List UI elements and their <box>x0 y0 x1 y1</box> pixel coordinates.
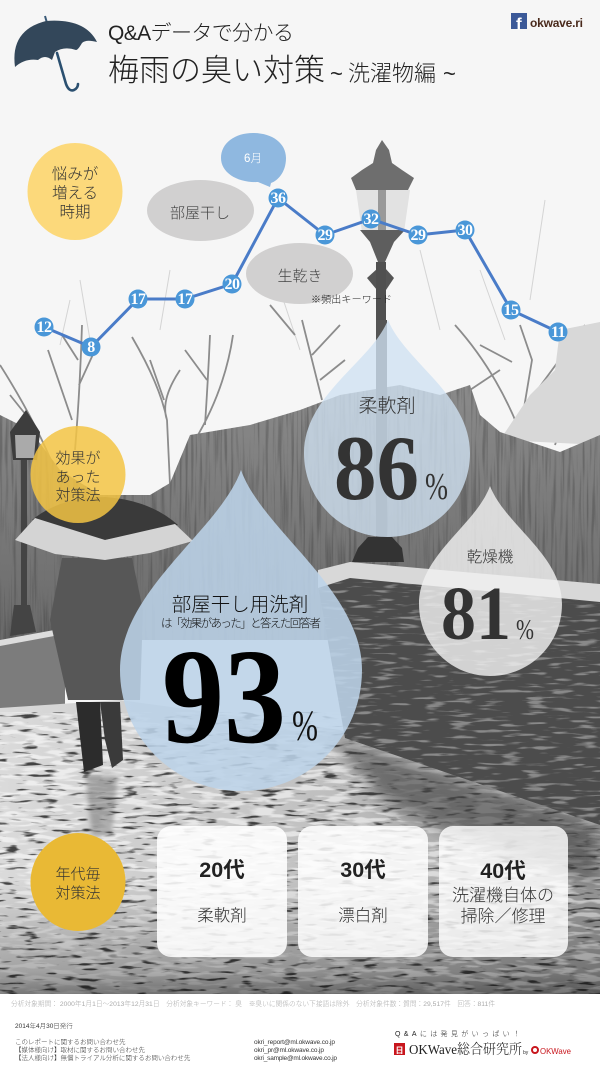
drop: 部屋干し用洗剤 93% <box>120 470 362 791</box>
drop: 乾燥機 81% <box>419 486 562 676</box>
contact list: このレポートに関するお問い合わせ先 <box>15 1037 126 1046</box>
contact list: okri_pr@ml.okwave.co.jp <box>254 1047 324 1054</box>
line chart: monthly counts: 20 <box>224 276 240 293</box>
keyword oval: 生乾き <box>246 243 353 304</box>
logo: OKWave総合研究所: by <box>523 1050 529 1056</box>
drop: 柔軟剤 86%: % <box>425 466 448 508</box>
header: umbrella icon <box>14 16 97 90</box>
header: title suffix: ~ <box>443 61 456 86</box>
man with umbrella <box>15 497 193 835</box>
card: 20代 柔軟剤: 20代 <box>199 858 245 882</box>
small left lamp <box>10 410 40 636</box>
contact list: okri_sample@ml.okwave.co.jp <box>254 1055 337 1062</box>
line chart: monthly counts: 12 <box>36 319 52 336</box>
badge: 効果があった対策法 <box>30 426 126 523</box>
card: 20代 柔軟剤: 柔軟剤 <box>197 906 247 925</box>
header: title suffix: ~ <box>330 61 343 86</box>
badge: 効果があった対策法: 効果が <box>55 450 101 467</box>
main lamp post <box>351 140 414 562</box>
keyword oval: 部屋干し: 部屋干し <box>170 205 230 222</box>
callout: 6月 <box>221 133 286 187</box>
tagline: Q&Aには発見がいっぱい！ <box>395 1029 520 1038</box>
drop: 部屋干し用洗剤 93%: 部屋干し用洗剤 <box>172 594 308 616</box>
contact list: 【媒体様向け】取材に関するお問い合わせ先 <box>15 1045 146 1054</box>
badge: 年代毎対策法 <box>30 833 126 931</box>
line chart: monthly counts <box>34 188 568 356</box>
logo: OKWave総合研究所: OKWave総合研究所 <box>409 1041 522 1058</box>
line chart: monthly counts: 17 <box>130 291 146 308</box>
badge: 悩みが増える時期: 悩みが <box>52 165 99 183</box>
card: 30代 漂白剤: 漂白剤 <box>338 906 388 925</box>
drop: 乾燥機 81%: 乾燥機 <box>467 548 513 566</box>
drop: 部屋干し用洗剤 93%: は「効果があった」と答えた回答者 <box>161 616 321 630</box>
line chart: monthly counts: 36 <box>270 190 286 207</box>
card: 30代 漂白剤: 30代 <box>340 858 386 882</box>
logo: okwave.ri facebook <box>511 13 583 34</box>
keyword note: ※頻出キーワード <box>311 294 392 306</box>
keyword oval: 部屋干し <box>147 180 254 241</box>
line chart: monthly counts: 30 <box>458 222 473 239</box>
line chart: monthly counts: 32 <box>364 211 379 228</box>
badge: 悩みが増える時期: 増える <box>52 184 98 202</box>
contact list: okri_report@ml.okwave.co.jp <box>254 1039 335 1046</box>
card: 40代 洗濯機自体の掃除／修理 <box>439 826 568 957</box>
card: 40代 洗濯機自体の掃除／修理: 掃除／修理 <box>460 907 546 926</box>
line chart: monthly counts: 8 <box>87 339 95 356</box>
drop: 乾燥機 81%: 81 <box>441 572 511 656</box>
badge: 年代毎対策法: 年代毎 <box>55 865 101 883</box>
line chart: monthly counts: 29 <box>410 227 426 244</box>
header: subtitle: Q&Aデータで分かる <box>108 22 293 45</box>
footer background <box>0 994 600 1067</box>
left bridge wall <box>0 632 65 715</box>
line chart: monthly counts: 15 <box>504 302 519 319</box>
badge: 効果があった対策法: あった <box>55 469 101 486</box>
drop: 柔軟剤 86% <box>304 320 470 537</box>
contact list: 【法人様向け】無償トライアル分析に関するお問い合わせ先 <box>15 1053 191 1062</box>
logo: okwave.ri facebook: f <box>516 14 522 34</box>
card: 40代 洗濯機自体の掃除／修理: 40代 <box>480 859 526 883</box>
drop: 乾燥機 81%: % <box>516 614 534 646</box>
road <box>0 700 600 994</box>
line chart: monthly counts: 29 <box>318 227 333 244</box>
drop: 柔軟剤 86%: 柔軟剤 <box>358 395 416 417</box>
line chart: monthly counts: 17 <box>178 291 193 308</box>
card: 20代 柔軟剤 <box>157 826 287 957</box>
card: 30代 漂白剤 <box>298 826 428 957</box>
callout: 6月: 6月 <box>244 153 262 165</box>
logo: okwave.ri facebook: okwave.ri <box>530 16 583 30</box>
header: title: 梅雨の臭い対策 <box>108 53 325 88</box>
drop: 柔軟剤 86%: 86 <box>334 417 419 519</box>
issue date: 2014年4月30日発行 <box>15 1021 73 1030</box>
header: title suffix: 洗濯物編 <box>348 61 436 86</box>
line chart: monthly counts: 11 <box>551 324 566 341</box>
badge: 年代毎対策法: 対策法 <box>55 885 101 902</box>
card: 40代 洗濯機自体の掃除／修理: 洗濯機自体の <box>452 886 554 905</box>
logo: OKWave総合研究所 <box>394 1041 571 1058</box>
analysis notes: 分析対象期間： 2000年1月1日～2013年12月31日 分析対象キーワード： 臭 ※臭いに関係のない下接語は除外 分析対象件数：質問：29,517件 回答：811件 <box>11 999 495 1008</box>
badge: 悩みが増える時期: 時期 <box>59 203 91 221</box>
brick wall <box>318 576 600 825</box>
badge: 悩みが増える時期 <box>28 143 122 240</box>
drop: 部屋干し用洗剤 93%: % <box>292 703 318 750</box>
contact list <box>15 1037 337 1062</box>
drop: 部屋干し用洗剤 93%: 93 <box>162 622 286 772</box>
badge: 効果があった対策法: 対策法 <box>55 487 101 504</box>
keyword oval: 生乾き: 生乾き <box>277 268 323 285</box>
logo: OKWave総合研究所: OKWave <box>540 1046 571 1056</box>
logo: OKWave総合研究所: 日 <box>396 1046 404 1055</box>
